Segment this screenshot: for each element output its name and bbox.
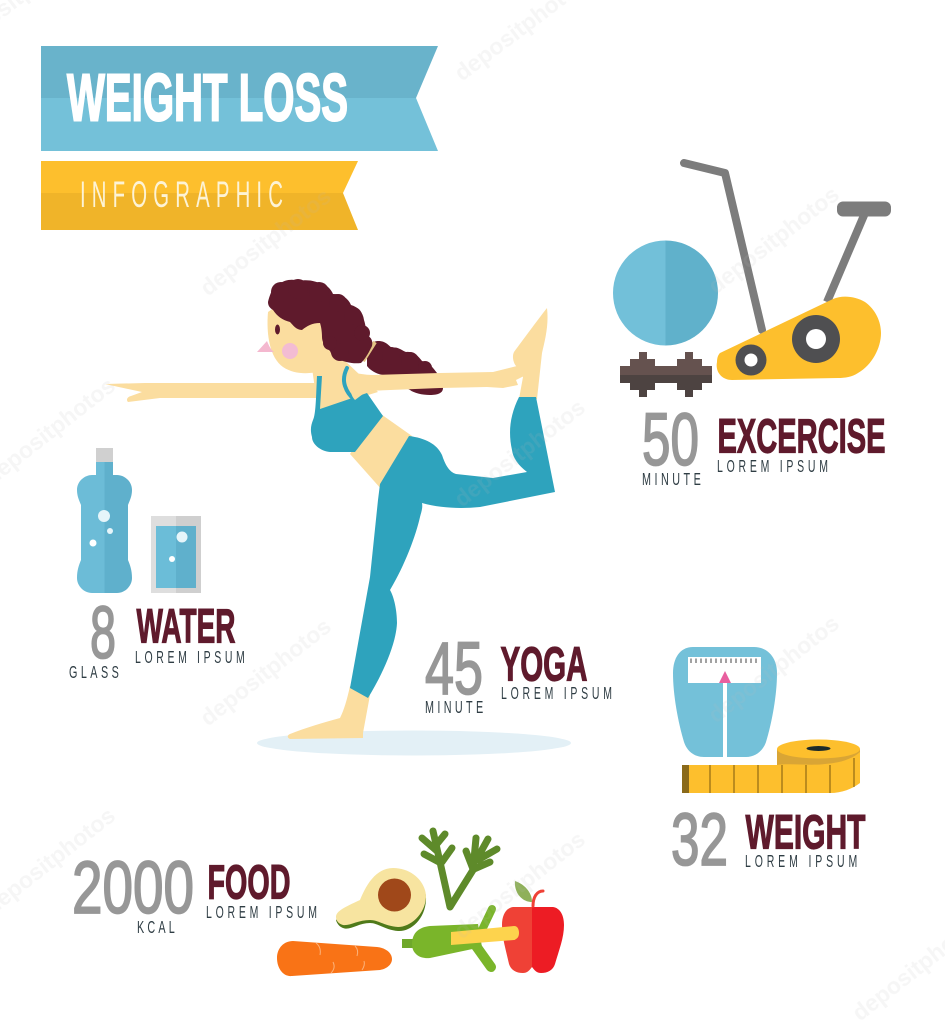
icon: yellow vegetable xyxy=(451,926,519,945)
panel: weight xyxy=(671,647,866,881)
stat: 2000 kcal food: FOOD xyxy=(208,856,290,910)
watermark: depositphotos xyxy=(703,610,844,728)
stat: 50 minute excercise: MINUTE xyxy=(642,470,701,490)
icon: exercise ball xyxy=(613,240,718,346)
standing foot xyxy=(288,686,370,739)
banner: weight loss: WEIGHT LOSS xyxy=(67,60,348,136)
nose xyxy=(257,341,274,352)
face xyxy=(268,302,341,373)
stat: 2000 kcal food xyxy=(72,846,317,938)
stat: 50 minute excercise: LOREM IPSUM xyxy=(717,457,828,477)
braid xyxy=(367,341,443,395)
stat: 45 minute yoga: YOGA xyxy=(500,638,588,692)
stat: 8 glass water: GLASS xyxy=(69,663,119,683)
icon: measuring tape xyxy=(682,740,860,793)
icon: exercise bike xyxy=(684,163,891,380)
watermark: depositphotos xyxy=(195,183,336,301)
icon: glass xyxy=(151,516,201,593)
bra xyxy=(311,376,383,452)
stat: 50 minute excercise xyxy=(642,398,886,490)
icon: bottle xyxy=(77,448,132,593)
eye xyxy=(275,324,280,334)
stat: 32 weight xyxy=(671,798,866,881)
watermark: depositphotos xyxy=(703,181,844,299)
icon: avocado xyxy=(336,868,426,931)
stat: 8 glass water: 8 xyxy=(90,591,116,674)
stat: 32 weight: 32 xyxy=(671,798,728,881)
hair tie xyxy=(363,342,375,361)
watermark: depositphotos xyxy=(449,394,590,512)
panel: exercise xyxy=(613,163,891,490)
panel: food xyxy=(72,831,564,976)
stat: 2000 kcal food: LOREM IPSUM xyxy=(206,903,317,923)
front arm xyxy=(105,383,318,402)
watermark: depositphotos xyxy=(449,826,590,944)
icon: dumbbell xyxy=(620,352,712,397)
stat: 8 glass water xyxy=(69,591,245,683)
icon: scale xyxy=(673,647,777,757)
stat: 45 minute yoga: 45 xyxy=(425,627,483,710)
banner: infographic xyxy=(41,161,358,230)
hair xyxy=(268,279,372,363)
stat: 45 minute yoga: LOREM IPSUM xyxy=(501,684,612,704)
watermark: depositphotos xyxy=(195,613,336,731)
icon: apple xyxy=(502,881,564,973)
icon: carrot greens xyxy=(422,831,497,907)
stat: 8 glass water: LOREM IPSUM xyxy=(135,648,245,668)
panel: title banners xyxy=(41,46,438,230)
leggings xyxy=(350,397,555,698)
icon: carrot xyxy=(277,941,392,976)
stat: 32 weight: WEIGHT xyxy=(746,806,866,860)
cheek xyxy=(282,343,298,359)
neck and chest xyxy=(312,358,378,410)
stat: 50 minute excercise: 50 xyxy=(642,398,699,481)
stat: 8 glass water: WATER xyxy=(136,600,236,654)
stat: 2000 kcal food: KCAL xyxy=(137,918,175,938)
stat: 45 minute yoga: MINUTE xyxy=(425,698,483,718)
icon: green vegetable xyxy=(402,909,492,967)
panel: water xyxy=(69,448,245,683)
bra strap xyxy=(344,368,354,399)
banner: infographic: INFOGRAPHIC xyxy=(80,175,283,216)
illustration: yoga woman xyxy=(105,279,571,756)
stat: 45 minute yoga xyxy=(425,627,612,718)
stat: 32 weight: LOREM IPSUM xyxy=(745,852,857,872)
back arm xyxy=(350,366,524,400)
stat: 2000 kcal food: 2000 xyxy=(72,846,194,929)
banner: weight loss xyxy=(41,46,438,151)
floor shadow xyxy=(257,730,571,756)
raised foot xyxy=(513,308,548,399)
midriff xyxy=(350,412,412,490)
